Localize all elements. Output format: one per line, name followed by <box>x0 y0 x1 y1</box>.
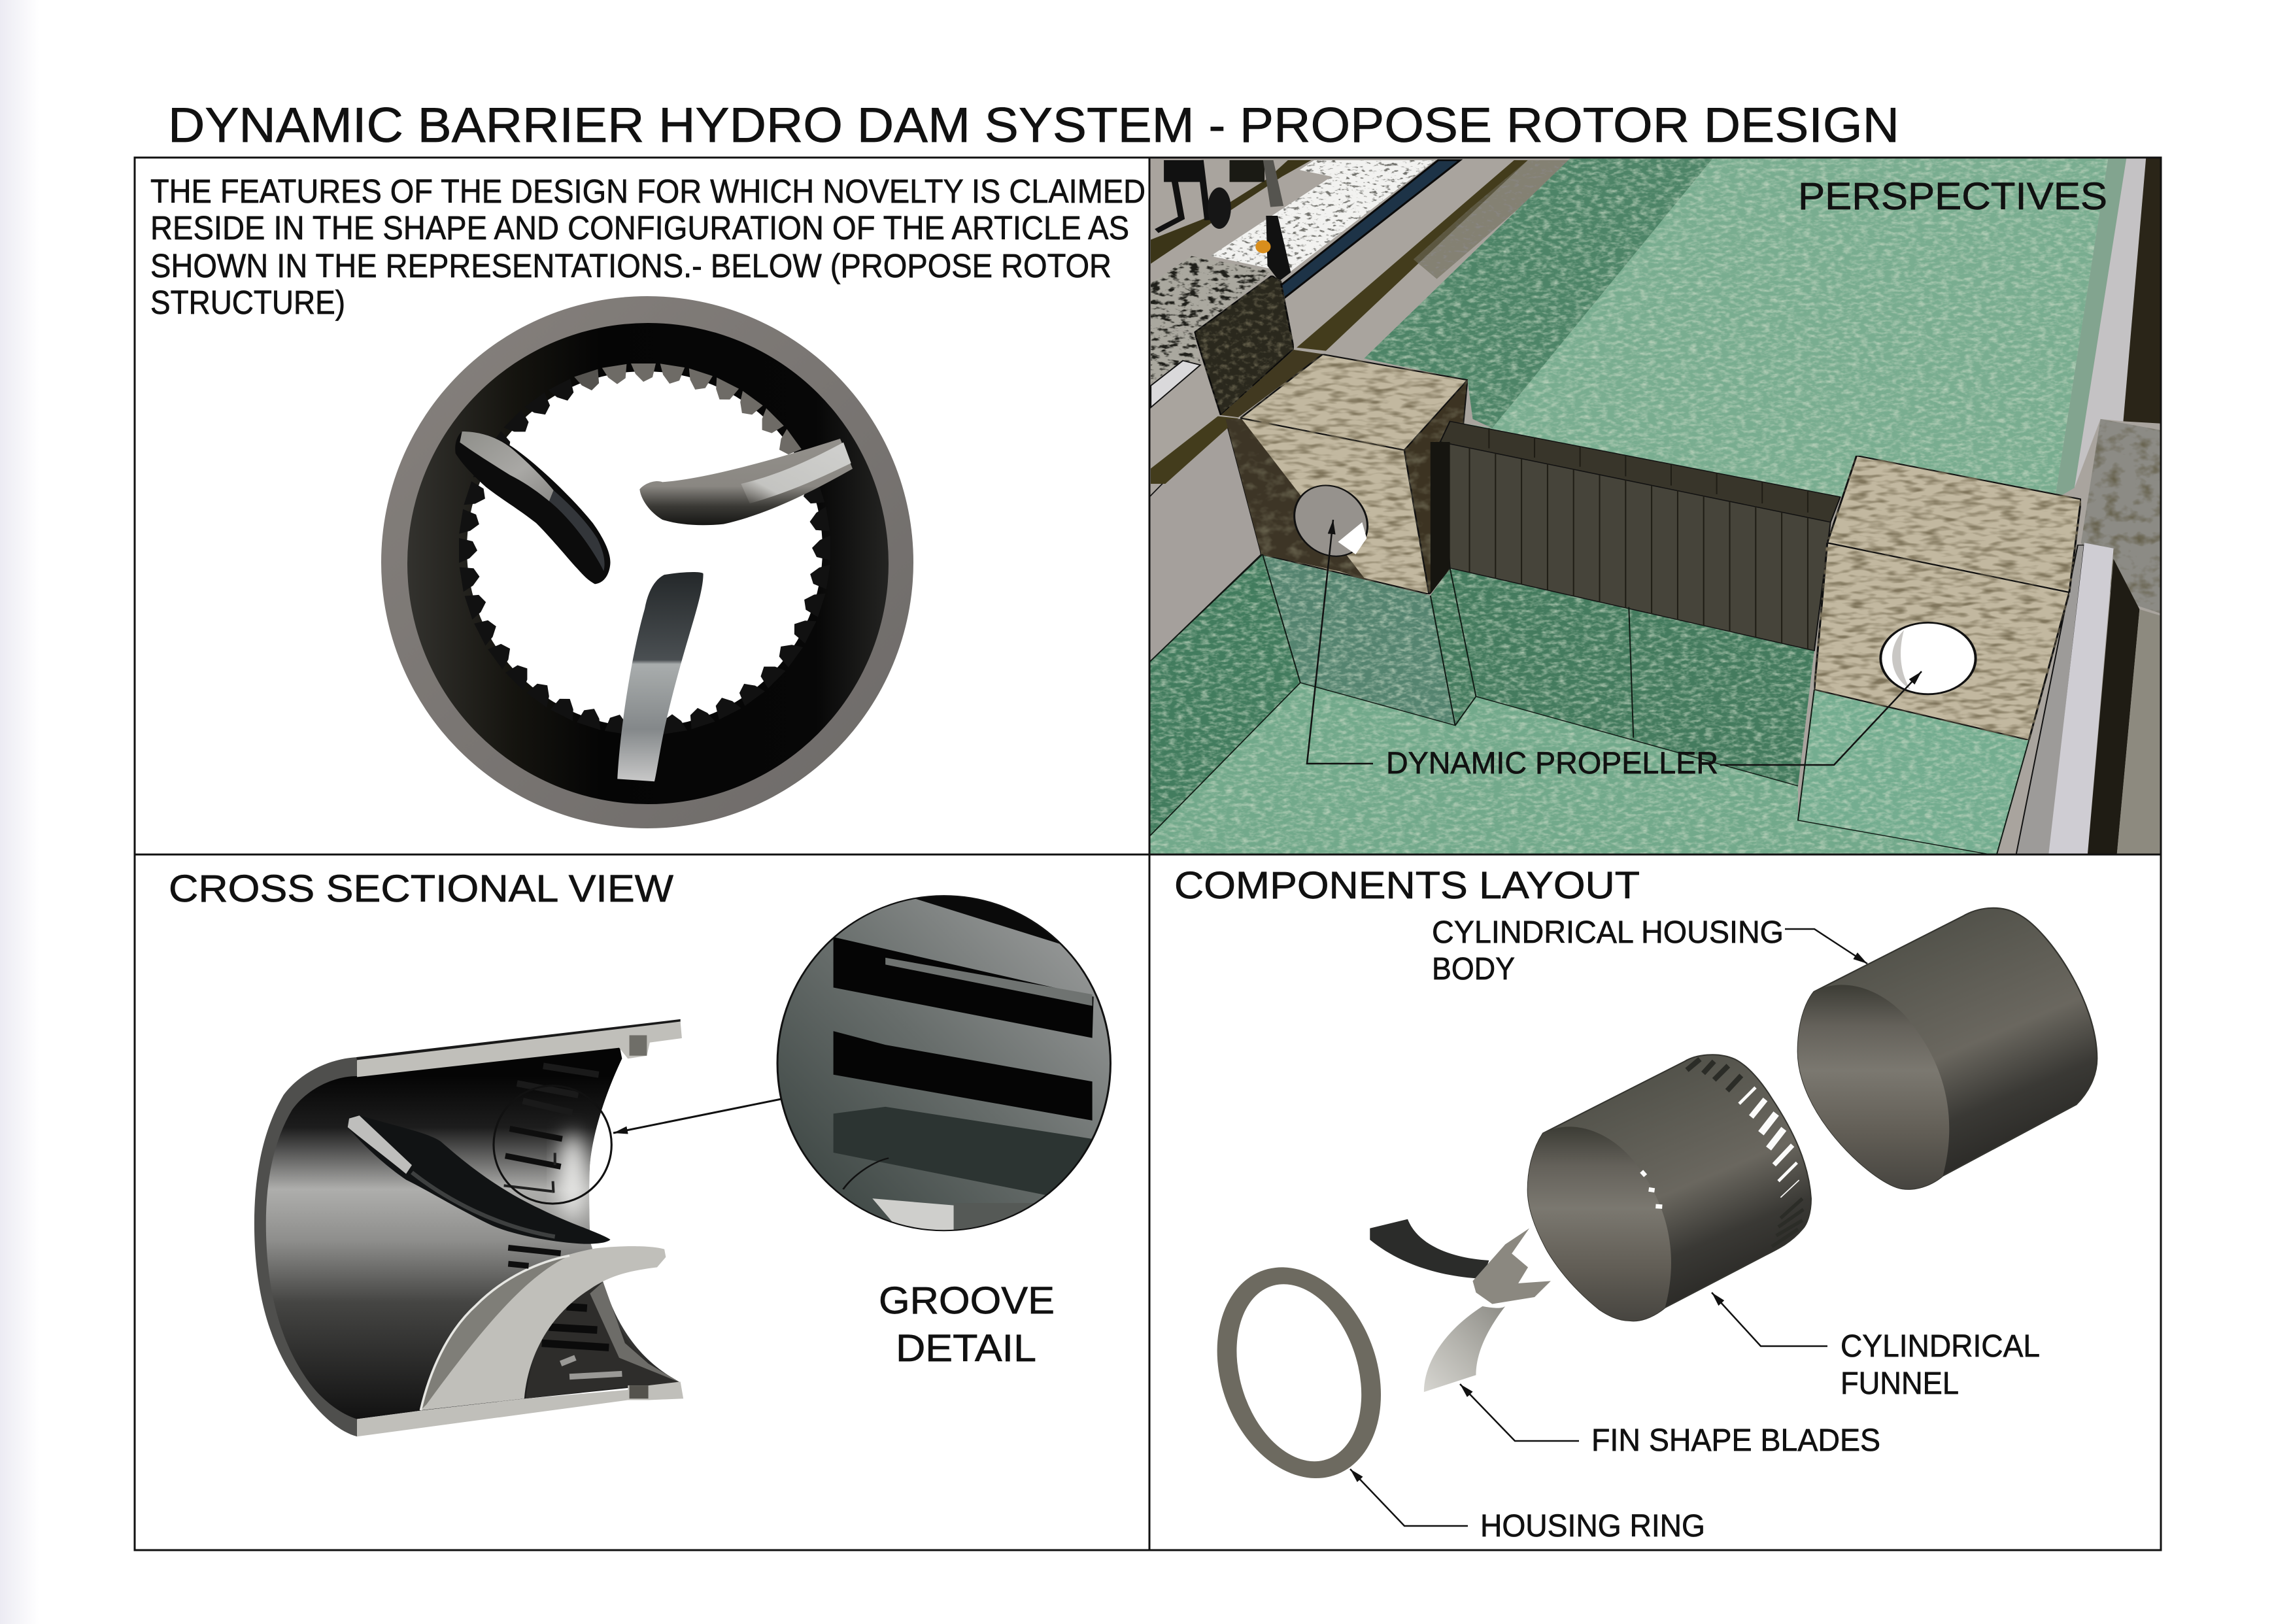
bottom housing section <box>357 1381 683 1436</box>
component labels: CYLINDRICAL <box>1841 1329 2040 1364</box>
cutaway housing illustration <box>254 1019 683 1436</box>
grooves <box>505 1128 562 1266</box>
description text block: THE FEATURES OF THE DESIGN FOR WHICH NOVELTY IS CLAIMED <box>150 173 1146 210</box>
leader lines: dynamic propeller <box>1307 520 1922 765</box>
label: groove detail: DETAIL <box>896 1327 1036 1370</box>
rotor illustration <box>381 296 913 828</box>
groove callout circle <box>494 1086 611 1204</box>
rotor groove teeth <box>459 364 830 735</box>
water surface: green channel <box>1149 158 2109 856</box>
top housing section <box>356 1019 682 1077</box>
panel: components layout <box>1174 864 2097 1544</box>
housing ring <box>1197 1259 1401 1487</box>
component labels: FUNNEL <box>1841 1366 1959 1401</box>
component labels <box>1432 915 2040 1544</box>
cylindrical funnel <box>1528 1055 1811 1321</box>
label: groove detail: GROOVE <box>879 1279 1055 1322</box>
label: components layout: COMPONENTS LAYOUT <box>1174 864 1640 907</box>
description text block: STRUCTURE) <box>150 284 345 321</box>
panel: cross sectional view <box>169 868 1113 1436</box>
title: DYNAMIC BARRIER HYDRO DAM SYSTEM - PROPOSE ROTOR DESIGN <box>168 97 1899 152</box>
label: dynamic propeller: DYNAMIC PROPELLER <box>1386 745 1718 780</box>
description text block: RESIDE IN THE SHAPE AND CONFIGURATION OF THE ARTICLE AS <box>150 209 1129 246</box>
side walls <box>1149 158 2162 856</box>
rotor blades <box>455 431 853 584</box>
arrow: to groove detail <box>613 1099 781 1133</box>
description text block: SHOWN IN THE REPRESENTATIONS.- BELOW (PROPOSE ROTOR <box>150 247 1112 284</box>
background: road, walkway and figure <box>1151 160 1571 351</box>
lower blade <box>420 1246 666 1410</box>
label: groove detail <box>879 1279 1055 1370</box>
panel: perspectives <box>1149 158 2162 856</box>
label: cross sectional view: CROSS SECTIONAL VIEW <box>169 868 673 910</box>
submerged lines <box>1149 554 2029 856</box>
groove detail circle <box>775 894 1113 1233</box>
component labels: HOUSING RING <box>1480 1509 1705 1544</box>
upper blade <box>348 1115 611 1244</box>
fin shape blades <box>1370 1219 1551 1392</box>
component labels: BODY <box>1432 952 1515 987</box>
lower groove compartment <box>526 1282 681 1398</box>
description text block <box>150 173 1146 321</box>
component labels: CYLINDRICAL HOUSING <box>1432 915 1784 950</box>
dam barrier <box>1431 421 1841 651</box>
leader lines: components <box>1350 929 1867 1526</box>
right pier with rotor opening <box>1814 456 2081 740</box>
label: perspectives: PERSPECTIVES <box>1798 175 2107 218</box>
frame grid <box>135 158 2161 1550</box>
left pier with rotor opening <box>1225 354 1468 594</box>
panel: rotor front view <box>150 173 1146 828</box>
cylindrical housing body <box>1798 908 2097 1189</box>
component labels: FIN SHAPE BLADES <box>1591 1423 1880 1458</box>
far stone block <box>1151 256 1323 484</box>
